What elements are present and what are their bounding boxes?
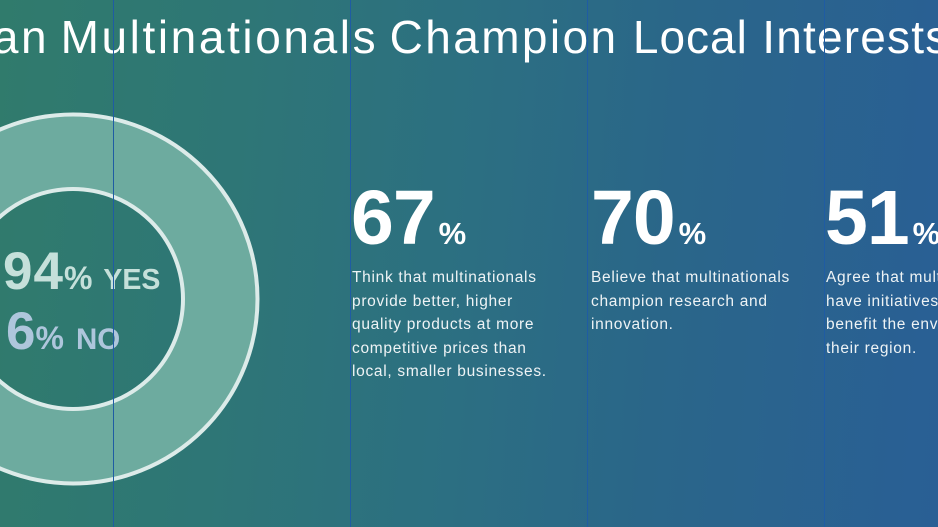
stat: 94% yes: 94% YES <box>3 242 160 301</box>
text: 67% description: competitive prices than <box>352 340 527 357</box>
text: 67% description: provide better, higher <box>352 293 513 310</box>
text: 67% description: quality products at more <box>352 316 534 333</box>
text: 70% description: champion research and <box>591 293 768 310</box>
text: 70% description: Believe that multinationals <box>591 269 790 286</box>
text: 70% description: innovation. <box>591 316 674 333</box>
statistic: 67%: 67% <box>351 175 466 261</box>
text: 67% description: local, smaller businesses. <box>352 363 547 380</box>
text: 51% description <box>826 269 938 357</box>
text: 67% description <box>352 269 547 380</box>
stat: 6% no: 6% NO <box>6 302 120 361</box>
text: 70% description <box>591 269 790 333</box>
text: 67% description: Think that multinationals <box>352 269 537 286</box>
statistic: 51%: 51% <box>825 175 938 261</box>
statistic: 70%: 70% <box>591 175 706 261</box>
text: 51% description: their region. <box>826 340 917 357</box>
